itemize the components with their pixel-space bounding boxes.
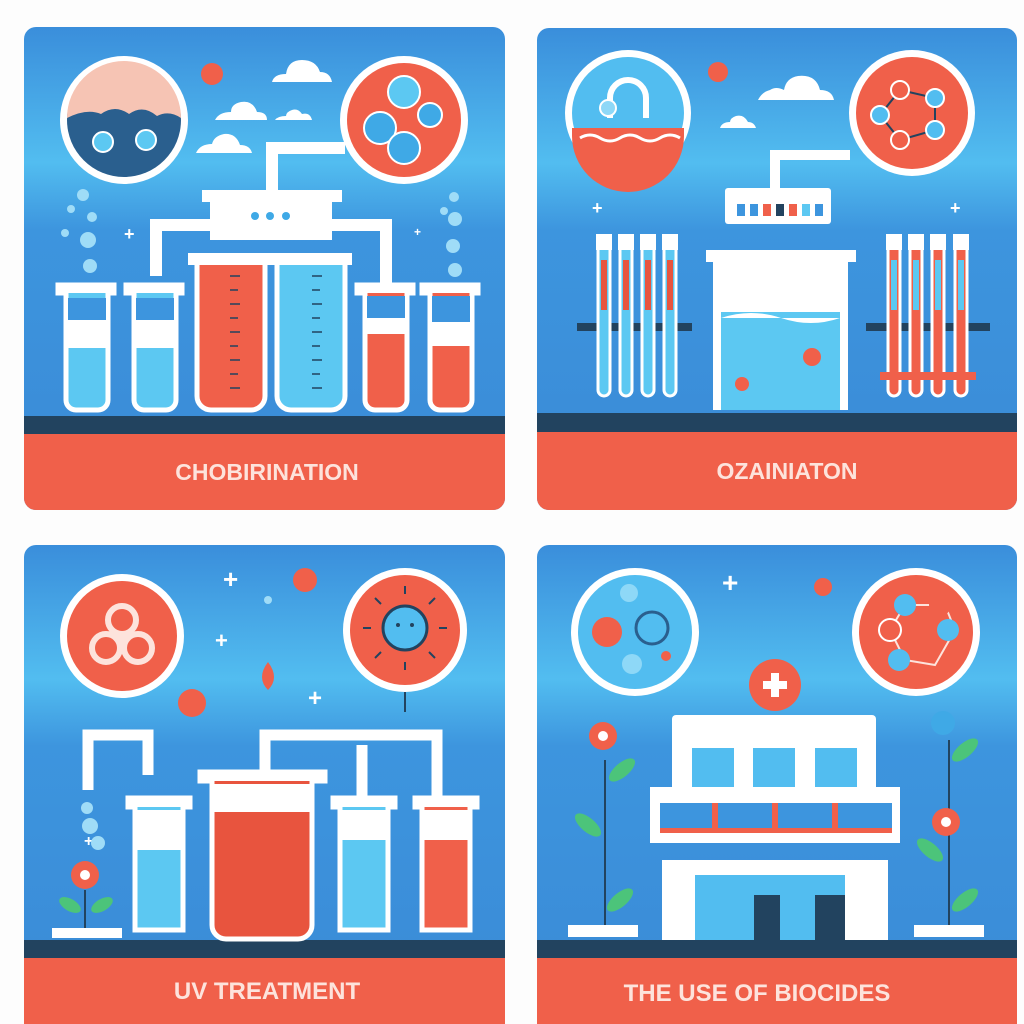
- panel: ozonation: [537, 28, 1017, 510]
- device: [188, 190, 352, 265]
- label: ozonation: OZAINIATON: [717, 458, 857, 484]
- panel: biocides: [537, 545, 1017, 1024]
- panel: chlorination: +: [124, 224, 135, 244]
- icon: medical cross: [749, 659, 801, 711]
- icon: uv sun circle: [343, 568, 467, 712]
- icon: molecule circle: [849, 50, 975, 176]
- tubes: [58, 265, 478, 410]
- panel: chlorination: +: [414, 225, 421, 239]
- flower: [52, 861, 122, 938]
- panel: chlorination: [24, 27, 505, 510]
- icon: microbes circle: [571, 568, 699, 696]
- icon: water surface circle: [565, 50, 691, 192]
- icon: biohazard circle: [60, 574, 184, 698]
- icon: molecule circle: [852, 568, 980, 696]
- panel: uv treatment: +: [84, 833, 93, 850]
- panel: uv treatment: +: [308, 685, 322, 712]
- pipes: [156, 148, 386, 288]
- tubes: [128, 772, 477, 939]
- pipes: [88, 735, 437, 800]
- label: uv treatment: UV TREATMENT: [174, 978, 360, 1005]
- panel: ozonation: +: [592, 198, 603, 218]
- label: chlorination: CHOBIRINATION: [175, 459, 359, 485]
- panel: ozonation: +: [950, 198, 961, 218]
- icon: bubbles circle: [340, 56, 468, 184]
- test tube racks: [577, 234, 990, 396]
- icon: water circle: [60, 56, 188, 184]
- label: biocides: THE USE OF BIOCIDES: [624, 980, 890, 1007]
- panel: uv treatment: +: [223, 564, 238, 594]
- panel: biocides: +: [722, 567, 738, 598]
- plants: [568, 711, 984, 937]
- beaker unit: [706, 188, 856, 410]
- clouds: [196, 60, 332, 153]
- panel: uv treatment: [24, 545, 505, 1024]
- clouds: [720, 76, 834, 128]
- building: [650, 715, 900, 940]
- panel: uv treatment: +: [215, 628, 228, 653]
